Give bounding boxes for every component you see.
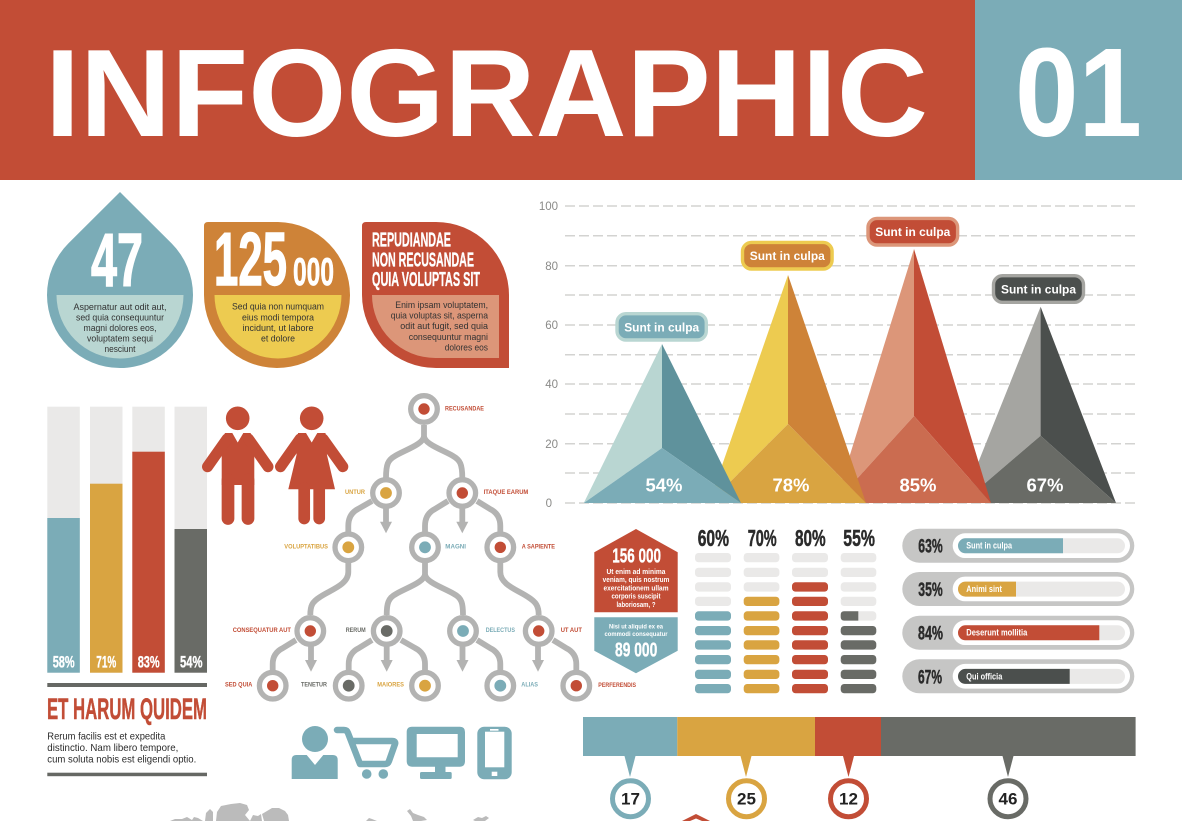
panel: orange number callout: 000 bbox=[293, 251, 334, 294]
pyramid: 85%: 85% bbox=[900, 476, 936, 496]
pyramid: 78%: 78% bbox=[772, 476, 810, 496]
chart: stacked bar bbox=[583, 717, 1136, 756]
chart: branching tree: UT AUT bbox=[561, 628, 582, 634]
callout: pyramid label red: Sunt in culpa bbox=[875, 225, 951, 239]
panel: teal drop callout: voluptatem sequi bbox=[87, 332, 153, 344]
text block: et harum quidem: distinctio. Nam libero tempore, bbox=[47, 743, 178, 754]
chart: segmented columns 60%: 60% bbox=[698, 525, 729, 551]
chart: branching tree: UNTUR bbox=[345, 490, 366, 496]
progress bar: 35% bbox=[902, 572, 1134, 606]
bar chart: vertical percentages bbox=[47, 407, 207, 673]
chart: segmented columns 55%: 55% bbox=[843, 525, 875, 551]
chart: branching tree: RERUM bbox=[346, 628, 366, 634]
progress bar: 35%: 35% bbox=[918, 580, 943, 601]
chart: gridlines and axis: 100 bbox=[539, 201, 558, 213]
chart: branching tree: A SAPIENTE bbox=[522, 544, 555, 550]
panel: teal drop callout: 47 bbox=[91, 218, 143, 302]
callout: 12: 12 bbox=[839, 790, 858, 809]
panel: orange number callout: Sed quia non numquam bbox=[232, 300, 324, 312]
chart: branching tree: RECUSANDAE bbox=[445, 406, 484, 412]
header banner bbox=[0, 0, 1182, 180]
chart: branching tree bbox=[225, 396, 636, 699]
callout: 46 bbox=[990, 756, 1026, 817]
chart: segmented columns 70%: 70% bbox=[748, 525, 777, 551]
chart: branching tree: TENETUR bbox=[301, 683, 328, 689]
pyramid: 67% bbox=[962, 307, 1116, 503]
chart: branching tree: PERFERENDIS bbox=[598, 683, 636, 689]
callout: 17: 17 bbox=[621, 790, 640, 809]
icon: woman bbox=[280, 406, 343, 518]
panel: teal hexagon stat bbox=[594, 617, 678, 673]
bar chart: vertical percentages: 83% bbox=[138, 652, 160, 672]
callout: 25: 25 bbox=[737, 790, 756, 809]
pyramid: 54% bbox=[584, 344, 741, 503]
panel: orange number callout: 125 bbox=[214, 217, 287, 301]
chart: branching tree: DELECTUS bbox=[486, 628, 515, 634]
progress bar: 63%: Sunt in culpa bbox=[966, 541, 1012, 551]
panel: orange number callout: incidunt, ut labore bbox=[242, 322, 314, 333]
chart: gridlines and axis: 0 bbox=[546, 498, 552, 510]
chart: segmented columns 70% bbox=[744, 525, 779, 693]
panel: red text callout: NON RECUSANDAE bbox=[372, 248, 474, 272]
callout: pyramid label dark: Sunt in culpa bbox=[1001, 282, 1076, 296]
callout: 17 bbox=[612, 756, 648, 817]
callout: pyramid label teal: Sunt in culpa bbox=[624, 320, 699, 334]
panel: teal drop callout: Aspernatur aut odit aut, bbox=[74, 301, 166, 312]
text block: et harum quidem: Rerum facilis est et expedita bbox=[47, 732, 166, 742]
panel: red hexagon stat: exercitationem ullam bbox=[604, 583, 669, 592]
chart: gridlines and axis bbox=[539, 201, 1135, 510]
panel: red hexagon stat: veniam, quis nostrum bbox=[603, 575, 670, 584]
panel: teal drop callout: sed quia consequuntur bbox=[76, 312, 164, 322]
chart: branching tree: ITAQUE EARUM bbox=[484, 490, 528, 496]
text block: et harum quidem: ET HARUM QUIDEM bbox=[47, 693, 207, 726]
progress bar: 35%: Animi sint bbox=[966, 584, 1002, 594]
chart: branching tree: ALIAS bbox=[521, 683, 538, 689]
chart: segmented columns 55% bbox=[841, 525, 876, 693]
panel: red text callout: dolores eos bbox=[445, 342, 488, 352]
world map fragment bbox=[170, 803, 489, 821]
progress bar: 84%: 84% bbox=[918, 624, 943, 645]
header banner: INFOGRAPHIC bbox=[45, 25, 928, 163]
icon: shopping cart bbox=[337, 730, 395, 779]
callout: 12 bbox=[830, 756, 866, 817]
panel: teal drop callout bbox=[47, 192, 193, 368]
panel: red text callout: REPUDIANDAE bbox=[372, 229, 451, 252]
chart: branching tree: CONSEQUATUR AUT bbox=[233, 628, 291, 634]
callout: 46: 46 bbox=[999, 790, 1017, 809]
header banner: 01 bbox=[1015, 22, 1142, 163]
icon: man bbox=[208, 406, 268, 518]
text block: et harum quidem: cum soluta nobis est eligendi optio. bbox=[47, 754, 196, 766]
icon: user bbox=[292, 726, 338, 779]
panel: teal drop callout: magni dolores eos, bbox=[84, 322, 156, 333]
text block: et harum quidem bbox=[47, 683, 207, 776]
icon: monitor bbox=[407, 727, 465, 779]
chart: branching tree: SED QUIA bbox=[225, 683, 253, 689]
panel: red text callout: QUIA VOLUPTAS SIT bbox=[372, 268, 480, 291]
chart: segmented columns 60% bbox=[695, 525, 731, 693]
pyramid: 54%: 54% bbox=[646, 476, 682, 496]
callout: pyramid label red bbox=[868, 218, 958, 245]
chart: gridlines and axis: 20 bbox=[545, 439, 558, 451]
pyramid: 67%: 67% bbox=[1026, 476, 1064, 496]
panel: orange number callout bbox=[204, 217, 350, 368]
panel: orange number callout: eius modi tempora bbox=[242, 311, 315, 322]
panel: red hexagon stat: 156 000 bbox=[612, 546, 661, 568]
panel: red hexagon stat: corporis suscipit bbox=[612, 592, 661, 601]
panel: teal hexagon stat: Nisi ut aliquid ex ea bbox=[609, 623, 663, 630]
panel: red text callout: odit aut fugit, sed quia bbox=[400, 320, 489, 331]
callout: 25 bbox=[728, 756, 764, 817]
panel: teal hexagon stat: 89 000 bbox=[615, 640, 657, 662]
panel: teal hexagon stat: commodi consequatur bbox=[604, 631, 668, 638]
pyramid: 78% bbox=[709, 275, 866, 503]
callout: pyramid label yellow bbox=[742, 242, 832, 269]
panel: orange number callout: et dolore bbox=[261, 332, 295, 344]
progress bar: 67%: Qui officia bbox=[966, 671, 1002, 681]
chart: gridlines and axis: 60 bbox=[545, 320, 558, 332]
chart: branching tree: MAIORES bbox=[377, 683, 404, 689]
progress bar: 84%: Deserunt mollitia bbox=[966, 628, 1027, 638]
chart: gridlines and axis: 40 bbox=[545, 379, 558, 391]
panel: red text callout: Enim ipsam voluptatem, bbox=[395, 299, 488, 310]
red hexagon fragment bbox=[682, 814, 710, 821]
chart: segmented columns 80%: 80% bbox=[795, 525, 826, 551]
panel: red hexagon stat: laboriosam, ? bbox=[616, 600, 656, 609]
progress bar: 67% bbox=[902, 659, 1134, 693]
progress bar: 84% bbox=[902, 616, 1134, 650]
chart: branching tree: VOLUPTATIBUS bbox=[284, 544, 328, 550]
panel: red text callout: quia voluptas sit, asperna bbox=[391, 310, 489, 320]
icon: smartphone bbox=[477, 727, 512, 779]
callout: pyramid label yellow: Sunt in culpa bbox=[750, 249, 825, 263]
chart: gridlines and axis: 80 bbox=[545, 261, 558, 273]
pyramid: 85% bbox=[835, 249, 991, 503]
panel: red hexagon stat: Ut enim ad minima bbox=[606, 567, 666, 576]
bar chart: vertical percentages: 54% bbox=[180, 652, 202, 672]
panel: red hexagon stat bbox=[594, 529, 678, 612]
progress bar: 67%: 67% bbox=[918, 667, 942, 688]
panel: red text callout bbox=[362, 222, 509, 368]
bar chart: vertical percentages: 71% bbox=[96, 652, 116, 672]
panel: red text callout: consequuntur magni bbox=[409, 331, 488, 342]
progress bar: 63%: 63% bbox=[918, 537, 943, 558]
chart: branching tree: MAGNI bbox=[445, 544, 466, 550]
panel: teal drop callout: nesciunt bbox=[104, 343, 136, 354]
callout: pyramid label dark bbox=[994, 276, 1084, 302]
chart: segmented columns 80% bbox=[792, 525, 828, 693]
callout: pyramid label teal bbox=[617, 314, 706, 340]
bar chart: vertical percentages: 58% bbox=[53, 652, 75, 672]
progress bar: 63% bbox=[902, 529, 1134, 563]
